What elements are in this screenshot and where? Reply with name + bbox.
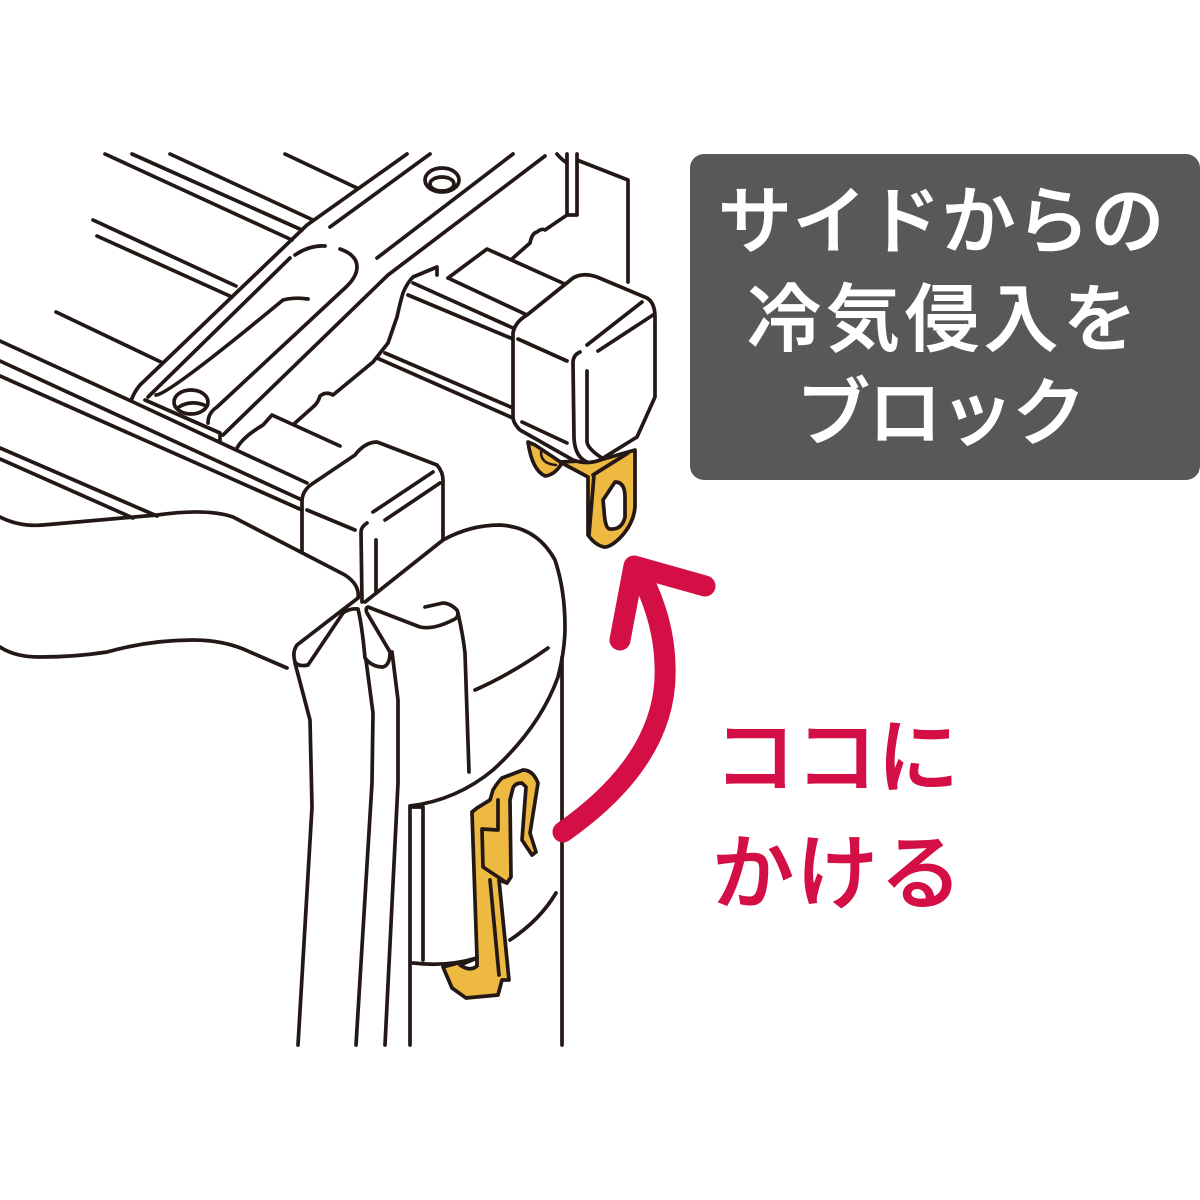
icon: screw hole bottom [174, 390, 208, 414]
curtain: hanging pleats [295, 652, 562, 1045]
panel: dark callout [690, 154, 1200, 480]
left end hook fitting [528, 442, 562, 476]
arrow: red curved arrow [563, 566, 705, 832]
bracket plate [131, 154, 628, 448]
right end eyelet fitting [560, 450, 635, 547]
rail bar [377, 249, 567, 418]
right end cap [513, 275, 655, 462]
left end cap [302, 442, 443, 602]
red label: hook here [712, 713, 964, 920]
curtain: folded top [294, 525, 565, 806]
red label: hook here: かける [712, 829, 964, 920]
callout text [718, 180, 1165, 455]
callout text: ブロック [796, 372, 1084, 455]
icon: curtain hook [413, 770, 538, 998]
eyelet hole [603, 482, 625, 529]
illustration: curtain rail and curtain [0, 154, 655, 1045]
left end hook detail [541, 452, 556, 465]
red label: hook here: ココに [714, 713, 959, 804]
callout text: サイドからの [718, 180, 1165, 263]
callout text: 冷気侵入を [747, 278, 1142, 361]
rail slats [0, 154, 357, 518]
callout background [690, 154, 1200, 480]
eyelet edge [589, 453, 628, 535]
curtain: left panel [0, 512, 358, 668]
icon: screw hole top [425, 168, 459, 192]
